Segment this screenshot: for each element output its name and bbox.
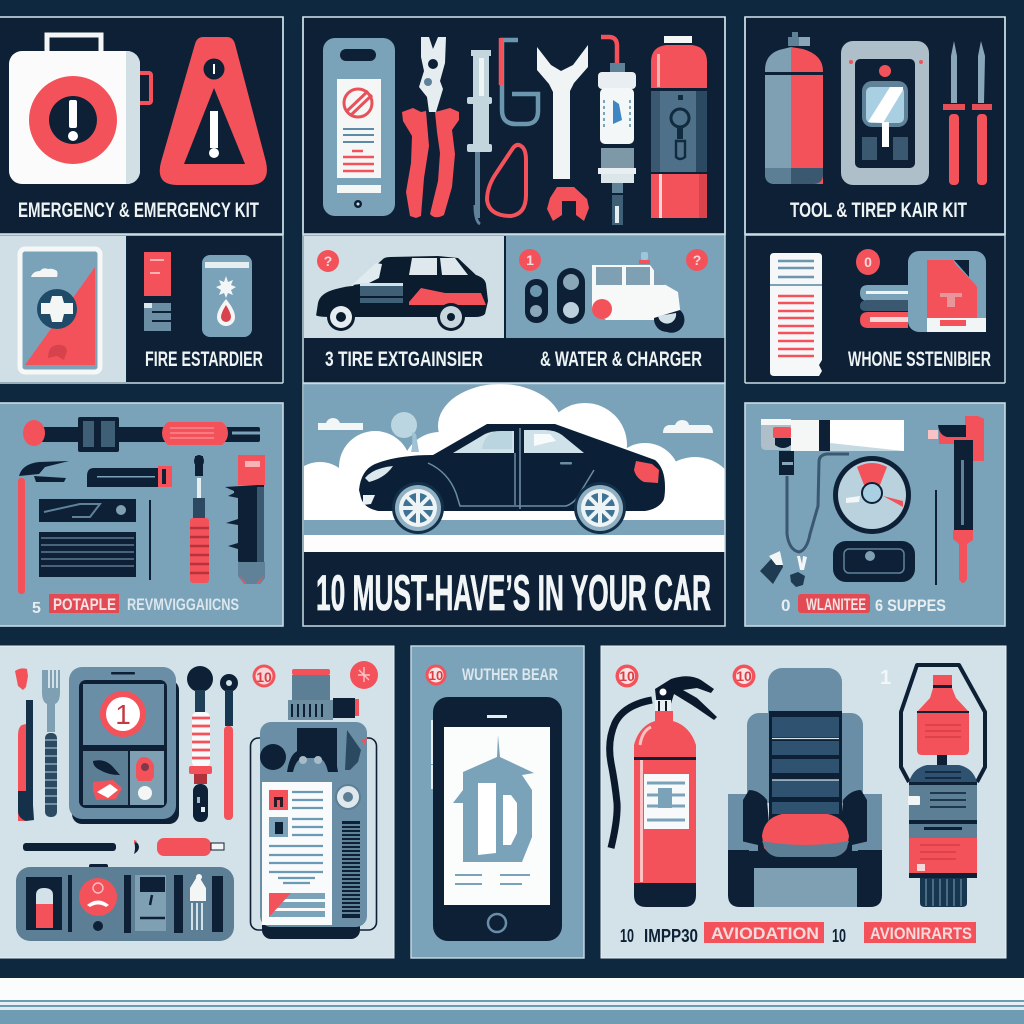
icon: red screwdriver (190, 455, 209, 583)
icon: badges 10 (616, 664, 891, 689)
icon: cutter blade (39, 499, 136, 522)
label: portable reviving items: 5 (32, 600, 41, 617)
panel: first aid card (0, 236, 126, 382)
icon: star badge (350, 661, 378, 689)
label: improvised avionics: 10 (620, 926, 634, 946)
label: improvised avionics: IMPP30 (644, 926, 698, 946)
label: portable reviving items: REVMVIGGAIICNS (127, 595, 239, 614)
label: improvised avionics: AVIODATION (711, 924, 819, 943)
panel: weather and supplies (745, 403, 1005, 626)
icon: number badges: ? (693, 252, 701, 268)
icon: first aid case (9, 35, 151, 184)
label: portable reviving items (32, 594, 239, 617)
icon: water filter (598, 37, 636, 225)
small clouds (318, 412, 713, 452)
icon: tablet with badge (69, 667, 179, 824)
label: weather and supplies: 0 (781, 596, 790, 615)
panel: weather gear phone (411, 646, 584, 958)
panel: tire extinguisher (304, 236, 504, 382)
icon: number badge: ? (324, 253, 332, 269)
title band (304, 552, 725, 626)
label: portable reviving items: POTAPLE (53, 595, 116, 614)
icon: extinguisher canister (651, 36, 707, 218)
icon: badges 10: 10 (619, 668, 635, 684)
label: improvised avionics: 10 (832, 926, 846, 946)
label: improvised avionics (620, 922, 976, 946)
icon: smartphone (431, 697, 562, 941)
icon: portable jump starter (250, 669, 376, 939)
icon: dark case (833, 541, 915, 582)
icon: black hatchback (316, 256, 488, 331)
icon: toolbox tray (16, 864, 234, 941)
icon: red sterilizer box (908, 251, 986, 332)
label: emergency kit: EMERGENCY & EMERGENCY KIT (18, 199, 259, 222)
icon: checklist sheet (770, 253, 822, 376)
icon: number badges (519, 249, 708, 271)
icon: two screwdrivers (943, 41, 992, 185)
icon: number badge: 0 (864, 254, 872, 270)
label: tire extinguisher: 3 TIRE EXTGAINSIER (325, 348, 483, 371)
panel: phone sterilizer (745, 236, 1005, 382)
label: weather and supplies: WLANITEE (806, 595, 866, 614)
icon: round tool (220, 674, 238, 820)
footer band (0, 978, 1024, 1024)
label: improvised avionics: AVIONIRARTS (870, 924, 972, 943)
icon: number badges: 1 (526, 252, 534, 268)
icon: phone with notice (323, 38, 395, 216)
icon: hygiene swabs (860, 285, 908, 328)
label: weather and supplies: 6 SUPPES (875, 596, 946, 615)
label: fire starter: FIRE ESTARDIER (145, 348, 263, 371)
road (304, 520, 725, 552)
icon: flashlight pump (761, 419, 904, 475)
panel: fire starter (127, 236, 283, 382)
icon: control panel (841, 41, 929, 185)
label: weather gear: WUTHER BEAR (462, 665, 558, 684)
icon: gauge hose (787, 454, 911, 552)
icon: safety hammer (928, 416, 984, 583)
panel: hero car (287, 384, 738, 626)
panel: emergency kit (0, 17, 283, 234)
panel: tools (303, 17, 725, 234)
label: weather and supplies (781, 594, 946, 615)
icon: fire extinguisher (610, 676, 717, 907)
icon: car seat (728, 668, 882, 907)
icon: warning triangle (160, 37, 267, 185)
icon: bar and small capsule (23, 838, 224, 856)
panel: portable reviving tools (0, 403, 283, 626)
icon: number badge left (15, 668, 28, 690)
icon: striped tray (39, 532, 136, 577)
panel: water and charger (506, 236, 725, 382)
cloud bank (304, 384, 724, 520)
icon: strap tool (23, 417, 262, 452)
icon: serrated glass breaker (225, 455, 265, 584)
icon: badge 10 (252, 664, 276, 688)
icon: pen and fork (18, 670, 60, 821)
icon: wrench (537, 45, 589, 221)
icon: small plugs (760, 551, 807, 587)
icon: badges 10: 1 (880, 667, 891, 689)
icon: red diagonal with cross (25, 267, 95, 365)
icon: probe tool (467, 50, 492, 224)
icon: badge 10 (426, 664, 446, 686)
icon: pliers (402, 37, 459, 218)
icon: badge 10: 10 (256, 669, 272, 685)
icon: white van (592, 252, 684, 333)
label: water and charger: & WATER & CHARGER (540, 348, 702, 371)
icon: cable loops (487, 38, 538, 216)
panel: tool and repair kit (745, 17, 1005, 234)
icon: fire starter canister (202, 255, 252, 337)
icon: tablet with badge: 1 (115, 699, 131, 730)
icon: battery pods (525, 268, 585, 324)
icon: red booklet (144, 252, 171, 331)
icon: house with 10 (453, 735, 534, 884)
panel: first aid tools and kit (0, 646, 394, 958)
icon: badge 10: 10 (429, 668, 443, 683)
icon: pry hook (18, 461, 69, 594)
icon: spring brush (187, 666, 213, 822)
icon: number badge (317, 250, 339, 272)
icon: black sedan (359, 424, 665, 534)
icon: tube handle (87, 466, 172, 487)
panel: extinguisher seat and lantern (601, 646, 1006, 958)
icon: gas cylinder (765, 32, 823, 184)
icon: number badge (856, 249, 880, 275)
icon: badges 10: 10 (736, 668, 752, 684)
icon: red lantern bottle (901, 665, 985, 907)
